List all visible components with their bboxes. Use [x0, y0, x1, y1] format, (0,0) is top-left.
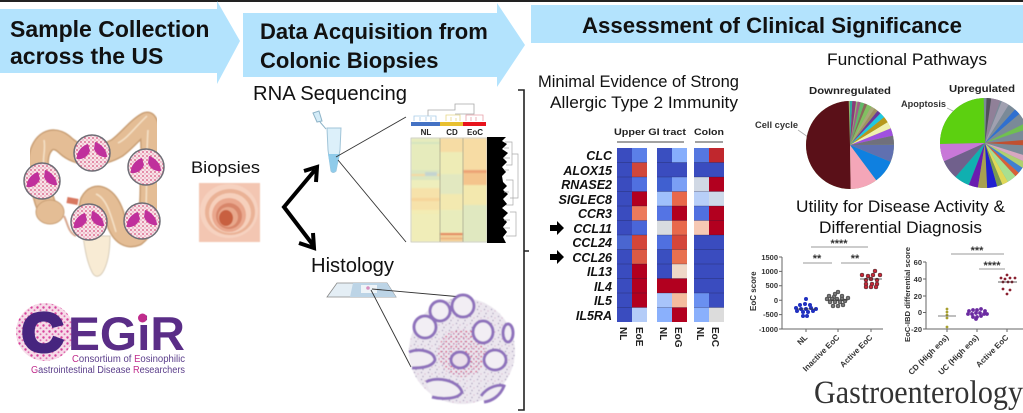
CEGiR logo — [16, 303, 185, 376]
group colour bar — [411, 122, 486, 126]
Active EoC points — [998, 274, 1017, 295]
y tick labels: 60 — [914, 258, 922, 267]
pie chart: Upregulated — [901, 83, 1015, 166]
x labels: UC (High eos) — [937, 333, 981, 377]
gene names: CLC — [586, 149, 613, 163]
eosinophil cell — [71, 204, 107, 240]
group labels: NL — [421, 128, 431, 137]
heatmap body — [411, 138, 487, 242]
y tick labels: 40 — [914, 275, 922, 284]
y tick labels: 0 — [918, 308, 922, 317]
UC points — [966, 307, 989, 321]
heatmap column borders — [411, 138, 487, 242]
heatmap block: EoE — [617, 148, 647, 322]
x labels: Active EoC — [974, 333, 1011, 369]
column group headers — [614, 127, 724, 142]
eosinophil cell — [128, 149, 164, 185]
significance brackets — [803, 238, 870, 265]
header arrow: Sample Collection across the US: across the US — [10, 43, 163, 69]
label: Biopsies: Biopsies — [191, 158, 260, 177]
axes — [923, 262, 1023, 332]
x labels: CD (High eos) — [907, 333, 951, 377]
pie chart: Upregulated: Upregulated — [949, 83, 1015, 95]
zoom lines from tube to heatmap — [336, 117, 406, 242]
label: RNA Sequencing: RNA Sequencing — [253, 83, 407, 105]
pie chart: Downregulated: Cell cycle — [755, 120, 798, 130]
significance brackets: ** — [813, 253, 822, 265]
column group headers: Colon — [694, 127, 724, 138]
eosinophil cell — [74, 135, 110, 171]
dot plot: EoC score — [749, 238, 883, 373]
gene names: IL13 — [587, 265, 612, 279]
eosinophil cell — [24, 163, 60, 199]
header arrow: Sample Collection across the US — [0, 1, 240, 84]
title: Functional Pathways: Functional Pathways — [827, 51, 987, 69]
colon illustration with eosinophils — [24, 116, 164, 276]
row separators and block outlines — [617, 162, 724, 308]
gene expression heatmap — [558, 127, 724, 348]
gene names: CCL11 — [573, 222, 612, 236]
header arrow: Data Acquisition from Colonic Biopsies: Data Acquisition from — [260, 19, 488, 44]
icon: arrow marking CCL11 — [550, 221, 564, 235]
x labels: Inactive EoC — [801, 333, 842, 373]
significance brackets: **** — [983, 260, 1001, 272]
eosinophil cell — [124, 203, 160, 239]
gene names: IL5 — [594, 294, 613, 308]
significance brackets: ** — [851, 253, 860, 265]
icon: arrow marking CCL26 — [550, 250, 564, 264]
section bracket — [518, 90, 529, 410]
y axis title: EoC-IBD differential score — [903, 247, 912, 342]
column labels: NL — [657, 327, 668, 340]
NL points — [794, 297, 818, 318]
y axis title: EoC score — [749, 271, 758, 311]
x labels: NL — [796, 333, 809, 347]
header arrow: Data Acquisition from Colonic Biopsies: Colonic Biopsies — [260, 48, 438, 73]
axes — [779, 257, 883, 332]
y tick labels: -1000 — [759, 325, 778, 334]
icon: microtube — [313, 111, 341, 172]
y tick labels — [759, 253, 778, 334]
x labels: Active EoC — [838, 333, 875, 369]
label: Histology: Histology — [311, 255, 394, 277]
CEGiR logo: Consortium of Eosinophilic — [72, 354, 187, 365]
header banner: Assessment of Clinical Significance — [531, 5, 1023, 43]
RNA-seq heatmap — [411, 104, 518, 243]
y tick labels: 0 — [774, 296, 778, 305]
gene names: SIGLEC8 — [558, 193, 612, 207]
CD points — [938, 308, 956, 328]
column labels: EoG — [672, 327, 683, 348]
group labels: EoC — [467, 128, 483, 137]
y tick labels: 1500 — [761, 253, 778, 262]
image: colon lumen — [199, 183, 260, 242]
gene names — [558, 149, 613, 323]
Active EoC points — [860, 269, 882, 289]
gene names: CCR3 — [578, 207, 612, 221]
CEGiR logo: C — [22, 303, 63, 363]
gene names: RNASE2 — [561, 178, 612, 192]
title: Minimal Evidence of Strong Allergic Type 2 Immunity: Allergic Type 2 Immunity — [550, 94, 739, 112]
y tick labels: -500 — [763, 310, 778, 319]
pie chart: Downregulated: Downregulated — [809, 85, 891, 97]
x labels — [796, 333, 875, 373]
dot plot: EoC-IBD differential score — [903, 245, 1023, 377]
y tick labels: -20 — [911, 325, 922, 334]
heatmap block: EoC — [694, 148, 724, 322]
pie chart: Downregulated — [755, 85, 891, 167]
branch arrows — [284, 167, 317, 248]
column labels: NL — [694, 327, 705, 340]
column group headers: Upper GI tract — [614, 127, 687, 138]
Inactive EoC points — [825, 290, 850, 308]
y tick labels: 20 — [914, 292, 922, 301]
gene names: ALOX15 — [562, 164, 613, 178]
title: Utility for Disease Activity & Differential Diagnosis: Differential Diagnosis — [819, 219, 982, 237]
column labels: EoE — [633, 327, 644, 347]
CEGiR logo: Gastrointestinal Disease Researchers — [31, 365, 189, 376]
y tick labels: 1000 — [761, 267, 778, 276]
significance brackets: *** — [971, 245, 984, 257]
significance brackets — [951, 245, 1005, 272]
title: Utility for Disease Activity & Differential Diagnosis: Utility for Disease Activity & — [796, 198, 1005, 216]
gene dendrogram — [487, 137, 518, 243]
header arrow: Sample Collection across the US: Sample Collection — [10, 16, 209, 42]
histology micrograph — [409, 295, 515, 404]
header arrow: Data Acquisition from Colonic Biopsies — [243, 3, 525, 87]
CEGiR logo: EGiR — [68, 307, 185, 360]
gene names: CCL24 — [572, 236, 612, 250]
column labels — [617, 327, 720, 348]
zoom lines from slide to histology image — [371, 289, 462, 367]
y tick labels: 500 — [765, 281, 778, 290]
heatmap dendrogram — [414, 104, 483, 121]
group labels: CD — [446, 128, 458, 137]
y tick labels — [911, 258, 922, 334]
gene names: IL4 — [594, 280, 612, 294]
column labels: EoC — [709, 327, 720, 347]
icon: microscope slide — [327, 283, 396, 297]
x labels — [907, 333, 1011, 377]
heatmap block: EoG — [657, 148, 687, 322]
column labels: NL — [617, 327, 628, 340]
pie chart: Upregulated: Apoptosis — [901, 99, 946, 109]
title: Minimal Evidence of Strong Allergic Type 2 Immunity: Minimal Evidence of Strong — [538, 73, 739, 91]
significance brackets: **** — [830, 238, 848, 250]
gene names: IL5RA — [576, 309, 612, 323]
group labels — [421, 128, 483, 137]
gene names: CCL26 — [572, 251, 613, 265]
header banner: Assessment of Clinical Significance: Assessment of Clinical Significance — [582, 13, 962, 38]
